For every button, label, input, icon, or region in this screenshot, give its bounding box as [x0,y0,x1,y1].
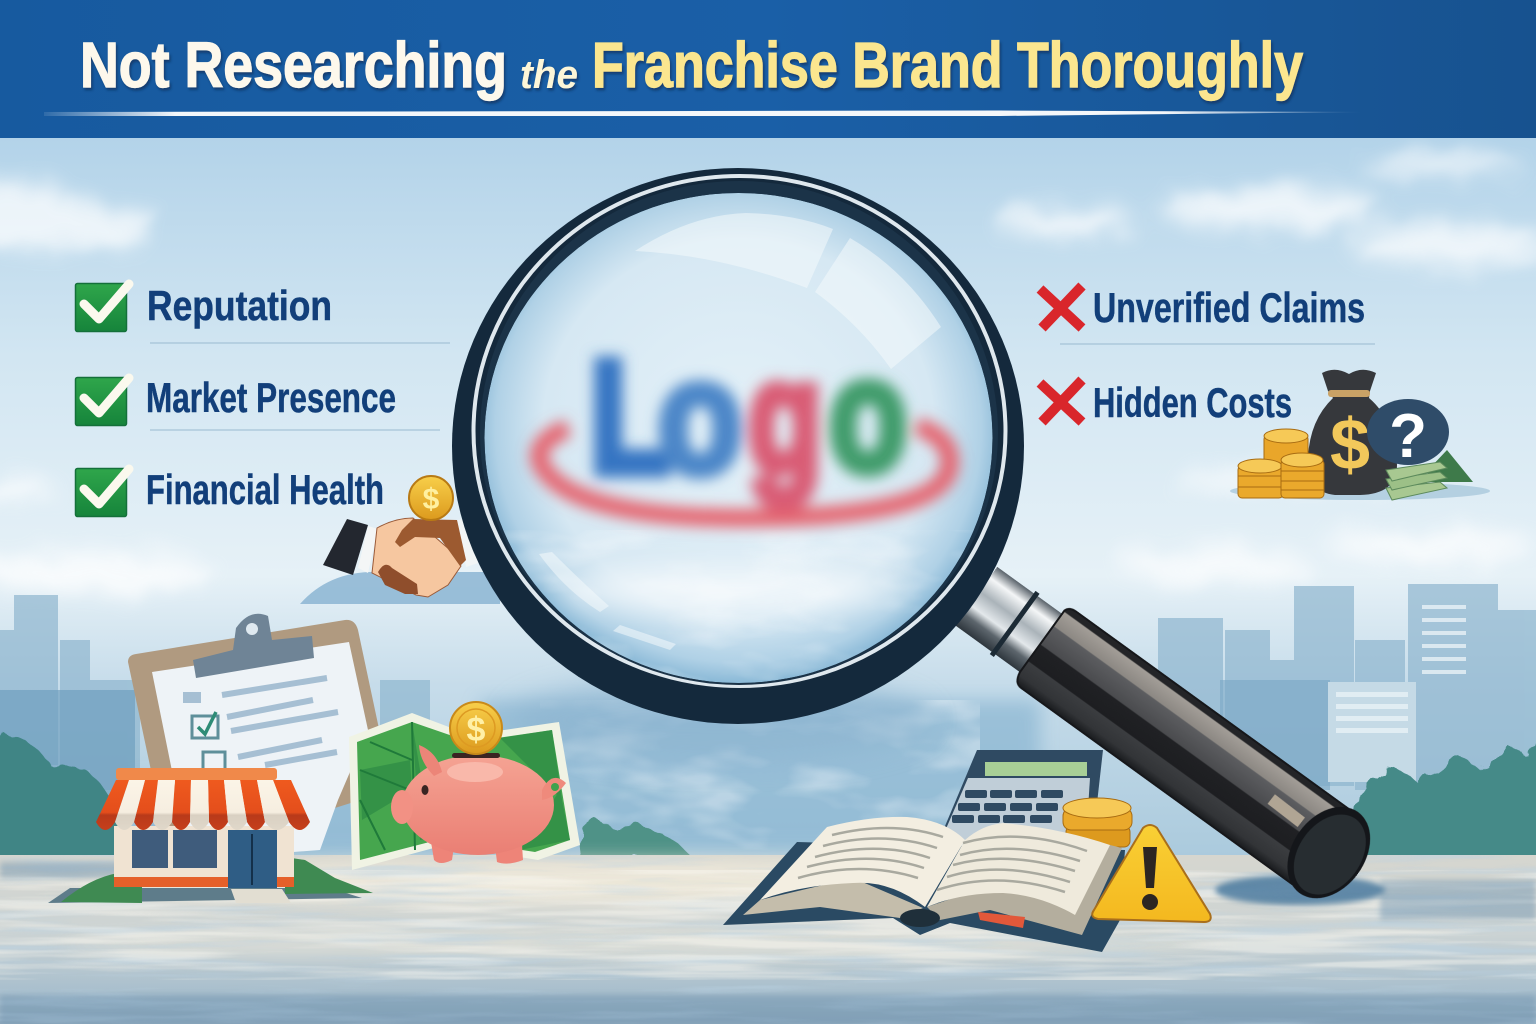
bushes [61,873,142,903]
warnings list [1040,284,1375,426]
icon: piggy bank on map [349,702,580,870]
icon: warning triangle [1092,825,1211,922]
item: unverified claims [1040,284,1375,344]
item: unverified claims: Unverified Claims [1093,284,1365,331]
page block [743,878,923,918]
icon: storefront [48,768,373,903]
ferrule [955,567,1066,675]
magnifying glass [452,168,1387,914]
coin stacks [1238,429,1324,498]
ground light path [60,860,1230,959]
wash under handshake [300,572,500,604]
ground [0,855,1536,1024]
title: Franchise Brand Thoroughly [592,29,1303,101]
icon: clipboard checklist [128,614,392,860]
magnifier shadow [510,678,930,762]
blue wash behind objects [130,700,1040,855]
blurred logo [539,325,950,518]
item: reputation [76,282,450,343]
lens glare [539,213,941,650]
title: Not Researching [80,29,507,101]
title [80,29,1303,101]
handle ground shadow [1215,875,1385,905]
header band [0,0,1536,138]
clouds [0,155,1536,592]
list lines [222,678,338,765]
blurred logo: L [590,327,670,506]
clip [193,614,314,678]
building windows [1336,605,1466,733]
city skyline [0,584,1536,820]
icon: piggy bank on map: $ [467,711,486,749]
pig [429,830,523,864]
left page [760,817,965,907]
ground texture [0,855,1536,1024]
coin stack [1063,798,1132,847]
rim [452,168,1024,724]
trees [0,734,1536,862]
item: market presence [76,374,440,430]
cash stack [1386,462,1447,500]
grip [1013,606,1356,890]
icon: money bag with question mark: $ [1330,405,1370,485]
awning [96,768,310,830]
item: market presence: Market Presence [146,374,396,421]
icon: open book [723,817,1125,952]
blurred logo: o [658,327,742,506]
handle [946,556,1387,914]
icon: money bag with question mark [1230,370,1490,500]
background sky [0,138,1536,868]
icon: money bag with question mark: ? [1389,402,1427,471]
icon: calculator and coins [940,750,1132,852]
item: financial health [76,466,384,516]
title: the [520,53,578,97]
item: reputation: Reputation [147,282,332,329]
cover [723,842,1125,952]
icon: handshake with coin [300,476,500,604]
base shadow [48,888,362,903]
title underline [44,110,1362,116]
blurred logo: o [829,325,907,504]
checklist [76,282,450,516]
lens [484,193,992,683]
item: financial health: Financial Health [146,466,384,513]
icon: handshake with coin: $ [423,483,440,516]
item: hidden costs [1040,379,1292,426]
bookmark [978,912,1025,928]
grip end [1270,791,1387,914]
blurred logo: g [748,327,822,506]
right page [927,823,1110,915]
item: hidden costs: Hidden Costs [1093,379,1292,426]
